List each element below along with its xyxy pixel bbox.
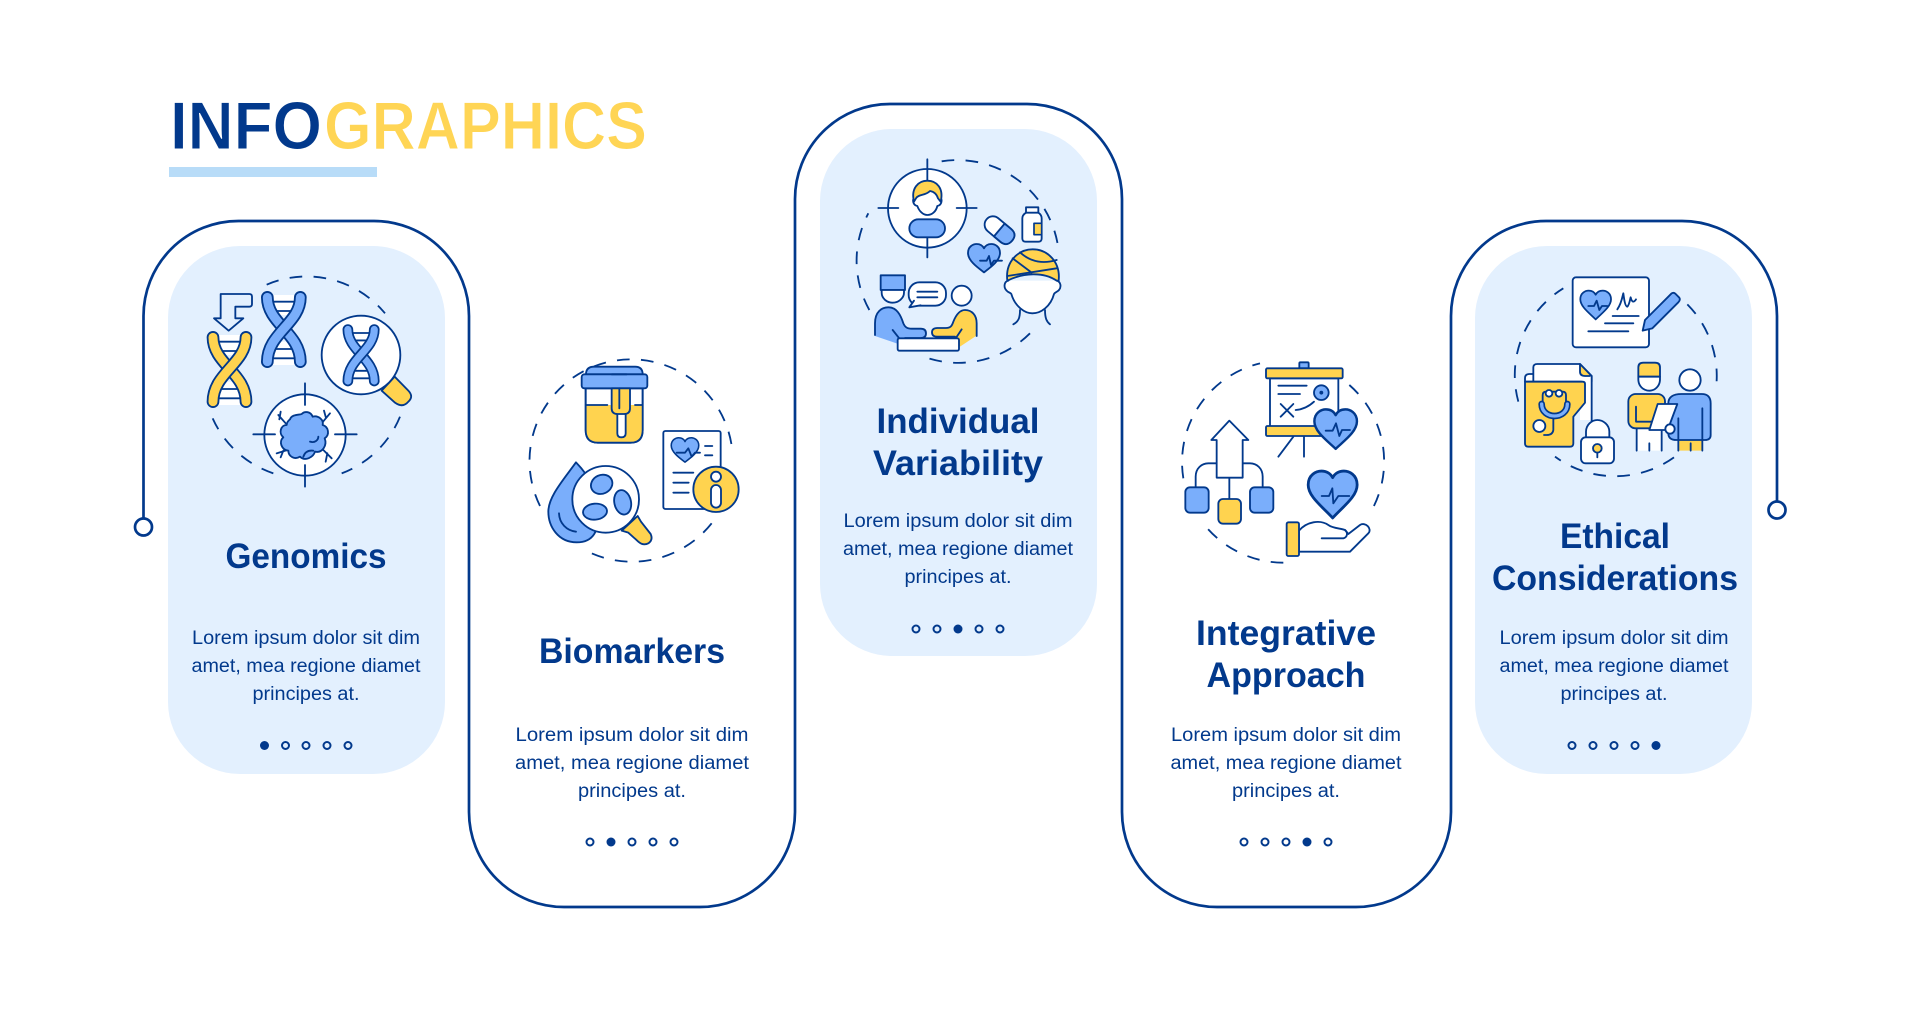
heading: integrative approach: Integrative <box>1196 614 1376 653</box>
description: individual variability <box>843 511 1074 588</box>
description: individual variability: principes at. <box>904 567 1012 588</box>
panel: biomarkers <box>515 359 750 846</box>
description: genomics: principes at. <box>252 684 360 705</box>
title: GRAPHICS <box>324 88 647 164</box>
icon: ethical considerations <box>1515 277 1717 476</box>
title <box>170 88 647 164</box>
description: individual variability: Lorem ipsum dolor sit dim <box>844 511 1072 532</box>
heading: biomarkers: Biomarkers <box>539 632 725 671</box>
description: ethical considerations: principes at. <box>1560 684 1668 705</box>
heading: integrative approach: Approach <box>1206 656 1366 695</box>
heading: individual variability: Variability <box>873 444 1044 483</box>
pagination dots: integrative approach <box>1240 838 1332 846</box>
heading: ethical considerations: Considerations <box>1492 559 1738 598</box>
description: integrative approach <box>1170 725 1402 802</box>
description: biomarkers: principes at. <box>578 781 686 802</box>
panel: individual variability <box>843 159 1074 634</box>
panel: genomics <box>192 276 421 750</box>
title: INFO <box>170 88 322 164</box>
panel background: individual variability <box>820 129 1097 656</box>
description: biomarkers: Lorem ipsum dolor sit dim <box>516 725 748 746</box>
description: integrative approach: Lorem ipsum dolor sit dim <box>1171 725 1401 746</box>
pagination dots: individual variability <box>912 624 1004 634</box>
heading: individual variability: Individual <box>876 402 1040 441</box>
heading: individual variability <box>873 402 1044 483</box>
heading: ethical considerations: Ethical <box>1560 517 1670 556</box>
panel background: ethical considerations <box>1475 246 1752 774</box>
icon: integrative approach <box>1182 362 1384 563</box>
description: individual variability: amet, mea regione diamet <box>843 539 1074 560</box>
heading: genomics: Genomics <box>226 537 386 576</box>
description: genomics: Lorem ipsum dolor sit dim <box>192 628 420 649</box>
panel background: genomics <box>168 246 445 774</box>
description: ethical considerations: Lorem ipsum dolor sit dim <box>1500 628 1728 649</box>
pagination dots: biomarkers <box>586 838 678 846</box>
panel: ethical considerations <box>1492 277 1738 750</box>
title underline <box>169 167 377 177</box>
description: genomics <box>192 628 421 705</box>
continuous outline connector <box>135 104 1786 907</box>
icon: biomarkers <box>530 359 739 562</box>
icon: individual variability <box>857 159 1060 363</box>
description: genomics: amet, mea regione diamet <box>192 656 421 677</box>
description: ethical considerations <box>1500 628 1729 705</box>
description: biomarkers: amet, mea regione diamet <box>515 753 750 774</box>
heading: ethical considerations <box>1492 517 1738 598</box>
description: biomarkers <box>515 725 750 802</box>
description: integrative approach: principes at. <box>1232 781 1340 802</box>
pagination dots: genomics <box>260 741 352 750</box>
description: ethical considerations: amet, mea regione diamet <box>1500 656 1729 677</box>
description: integrative approach: amet, mea regione diamet <box>1170 753 1402 774</box>
pagination dots: ethical considerations <box>1568 741 1660 750</box>
heading: integrative approach <box>1196 614 1376 695</box>
panel: integrative approach <box>1170 362 1402 846</box>
icon: genomics <box>213 276 411 487</box>
